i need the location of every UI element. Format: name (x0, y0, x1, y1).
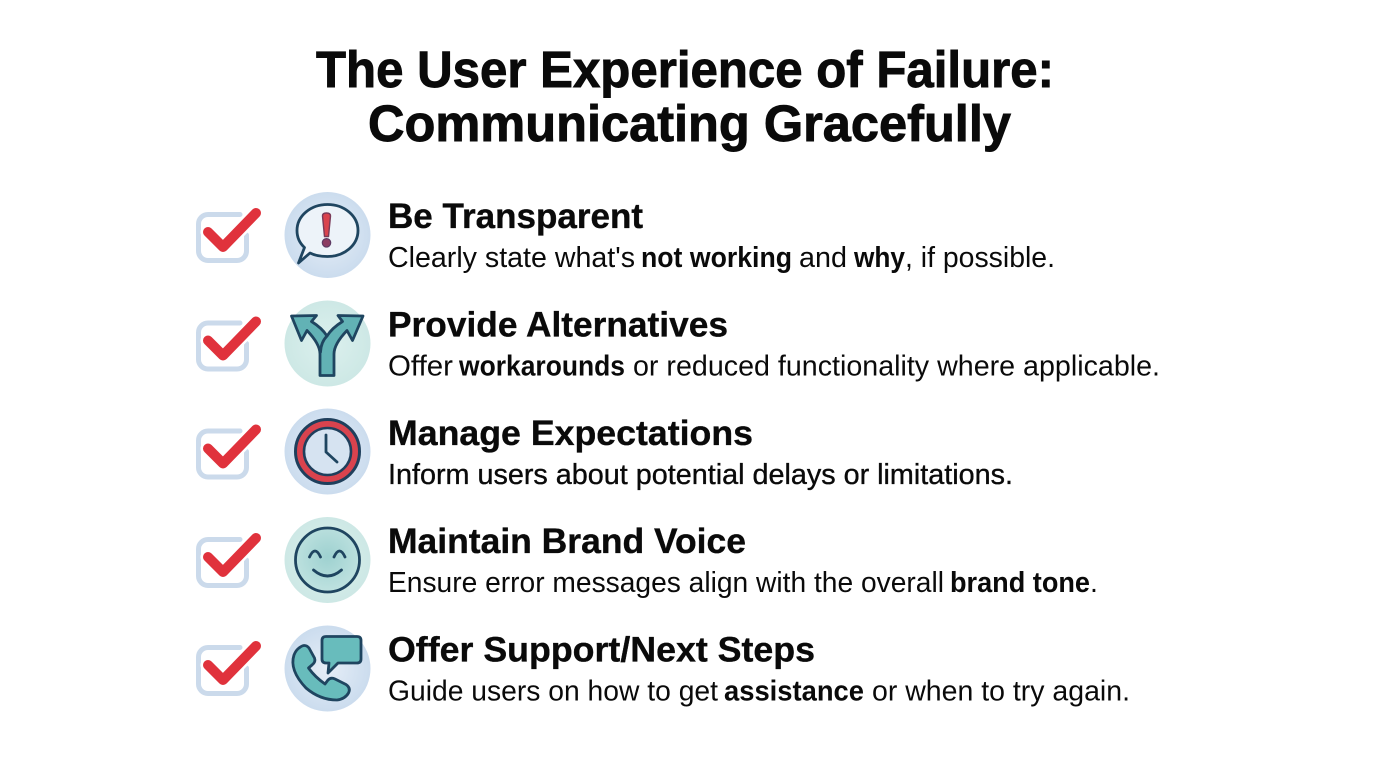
heading: Maintain Brand Voice (388, 522, 746, 561)
icon: forking arrows (284, 300, 370, 386)
description: Ensure error messages align with the overall (388, 567, 944, 599)
description (388, 350, 1160, 382)
description: or when to try again. (872, 676, 1130, 708)
description: or reduced functionality where applicable. (633, 350, 1160, 382)
title (316, 41, 1054, 152)
description (388, 242, 1055, 274)
description: Inform users about potential delays or limitations. (388, 459, 1013, 491)
icon: checked checkbox (198, 213, 256, 260)
icon: smiling face (284, 517, 370, 603)
icon: checked checkbox (198, 322, 256, 369)
description: Offer (388, 350, 454, 382)
description: and (799, 242, 847, 274)
description: , if possible. (905, 242, 1055, 274)
item: Maintain Brand Voice (198, 517, 1098, 603)
description (388, 676, 1130, 708)
item: Provide Alternatives (198, 300, 1160, 386)
icon: speech bubble with exclamation mark (284, 192, 370, 278)
description: Guide users on how to get (388, 676, 718, 708)
heading: Provide Alternatives (388, 306, 728, 344)
item: Offer Support/Next Steps (198, 626, 1130, 712)
icon: phone and chat bubble (284, 626, 370, 712)
item: Be Transparent (198, 192, 1055, 278)
description: . (1090, 567, 1098, 599)
heading: Be Transparent (388, 197, 643, 236)
icon: checked checkbox (198, 430, 256, 477)
heading: Manage Expectations (388, 414, 753, 453)
description: why (853, 242, 905, 274)
icon: clock (284, 408, 370, 494)
description: brand tone (950, 567, 1090, 599)
title: Communicating Gracefully (368, 95, 1012, 152)
item: Manage Expectations (198, 408, 1013, 494)
icon: checked checkbox (198, 538, 256, 586)
description: workarounds (458, 350, 625, 382)
description: assistance (724, 676, 864, 708)
description: not working (641, 242, 792, 274)
description: Clearly state what's (388, 242, 635, 274)
heading: Offer Support/Next Steps (388, 630, 815, 670)
title: The User Experience of Failure: (316, 41, 1054, 98)
icon: checked checkbox (198, 646, 256, 694)
